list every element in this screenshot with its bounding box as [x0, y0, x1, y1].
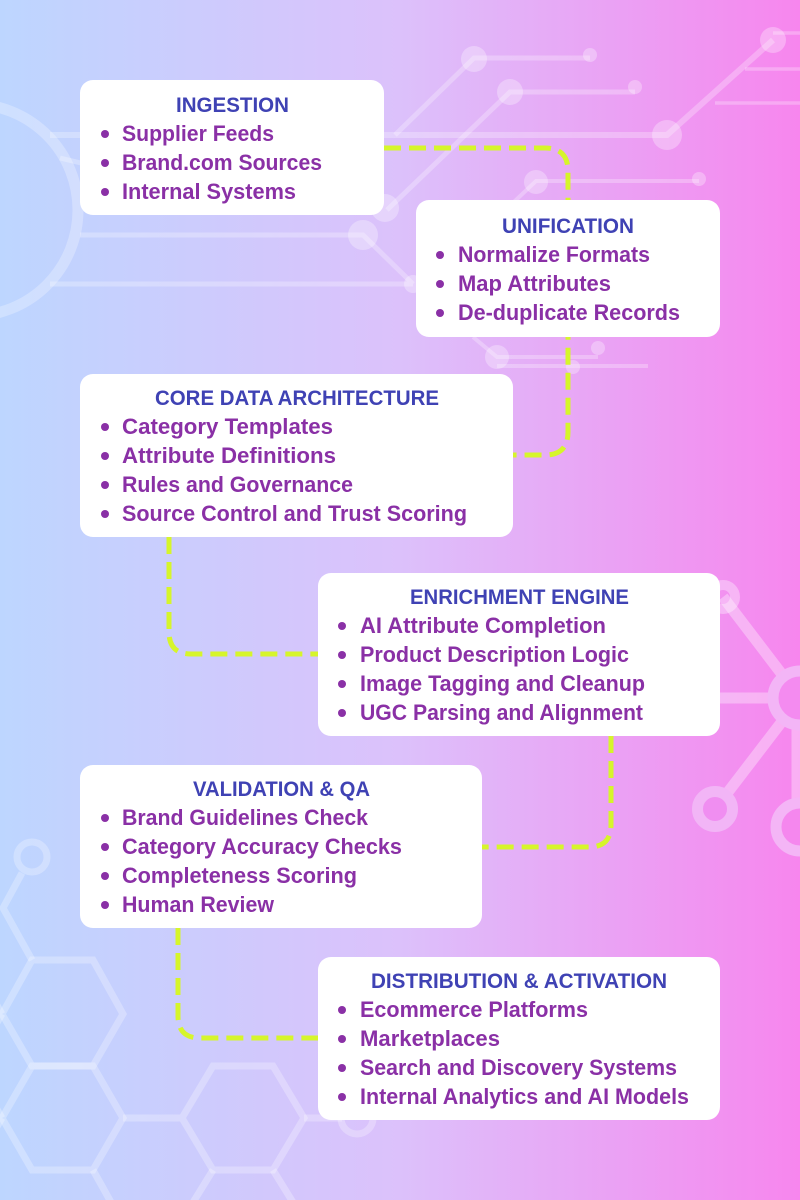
heading: core data architecture: CORE DATA ARCHITECTURE	[155, 387, 439, 410]
list: validation items: Human Review	[122, 892, 275, 917]
connector: enrichment engine to validation	[482, 736, 611, 847]
list: distribution items: Marketplaces	[360, 1026, 500, 1051]
heading: ingestion: INGESTION	[176, 94, 289, 117]
list: validation items: Completeness Scoring	[122, 863, 357, 888]
heading: distribution and activation: DISTRIBUTION & ACTIVATION	[371, 970, 667, 993]
list: unification items: Map Attributes	[458, 271, 611, 296]
panel: ingestion	[80, 80, 384, 215]
list: unification items: Normalize Formats	[458, 242, 650, 267]
list: core data architecture items: Rules and Governance	[122, 472, 353, 497]
list: validation items: Category Accuracy Checks	[122, 834, 402, 859]
list: ingestion items: Brand.com Sources	[122, 150, 322, 175]
heading: unification: UNIFICATION	[502, 215, 634, 238]
heading: enrichment engine: ENRICHMENT ENGINE	[410, 586, 629, 609]
decoration: right node network	[698, 585, 800, 851]
list: validation items: Brand Guidelines Check	[122, 805, 369, 830]
panel: enrichment engine	[318, 573, 720, 736]
list: unification items: De-duplicate Records	[458, 300, 680, 325]
connector: ingestion to core data architecture	[384, 148, 568, 455]
decoration: bottom-left hexagons	[0, 842, 373, 1200]
panel: unification	[416, 200, 720, 337]
connector: validation to distribution	[178, 928, 318, 1038]
list: ingestion items: Internal Systems	[122, 179, 296, 204]
list: enrichment engine items: AI Attribute Completion	[360, 613, 606, 638]
list: core data architecture items: Source Control and Trust Scoring	[122, 501, 467, 526]
list: distribution items	[338, 997, 689, 1109]
list: ingestion items	[101, 121, 322, 204]
list: core data architecture items: Attribute Definitions	[122, 443, 336, 468]
heading: validation and QA: VALIDATION & QA	[193, 778, 370, 801]
list: enrichment engine items: UGC Parsing and Alignment	[360, 700, 644, 725]
list: distribution items: Search and Discovery Systems	[360, 1055, 677, 1080]
panel: distribution and activation	[318, 957, 720, 1120]
list: enrichment engine items: Image Tagging and Cleanup	[360, 671, 645, 696]
decoration: top circuit network	[0, 27, 800, 374]
list: core data architecture items	[101, 414, 467, 526]
panel: validation and QA	[80, 765, 482, 928]
list: ingestion items: Supplier Feeds	[122, 121, 274, 146]
list: enrichment engine items: Product Description Logic	[360, 642, 629, 667]
list: distribution items: Ecommerce Platforms	[360, 997, 588, 1022]
list: unification items	[436, 242, 680, 325]
list: core data architecture items: Category Templates	[122, 414, 333, 439]
list: validation items	[101, 805, 402, 917]
list: enrichment engine items	[338, 613, 645, 725]
panel: core data architecture	[80, 374, 513, 537]
connector: core data architecture to enrichment engine	[169, 537, 318, 654]
list: distribution items: Internal Analytics and AI Models	[360, 1084, 689, 1109]
